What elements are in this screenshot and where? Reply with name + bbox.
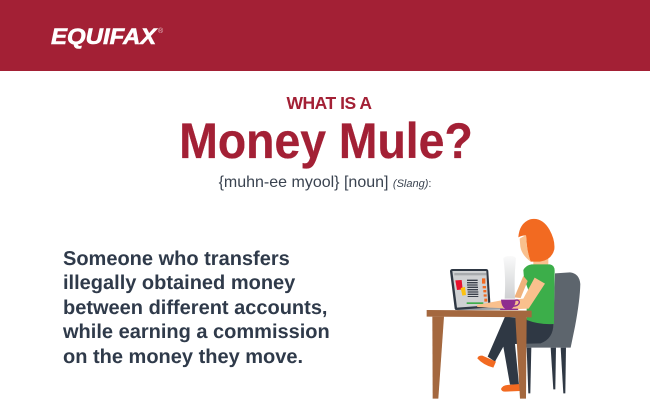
face (520, 235, 531, 262)
laptop base (456, 307, 503, 310)
far arm (514, 276, 528, 298)
pronunciation line: {muhn-ee myool} [noun] (Slang): (219, 174, 431, 191)
definition text: while earning a commission (63, 321, 330, 343)
title: Money Mule?: Money Mule? (179, 113, 473, 169)
definition text: on the money they move. (63, 346, 303, 368)
near arm (477, 278, 545, 309)
desk (427, 310, 532, 399)
torso (523, 264, 555, 324)
far shoe (477, 356, 496, 368)
logo: Equifax: EQUIFAX (51, 24, 156, 49)
header band (0, 0, 650, 71)
definition text: Someone who transfers (63, 248, 290, 270)
definition text (63, 248, 330, 368)
logo registered mark: ® (158, 28, 163, 35)
laptop screen (450, 269, 491, 310)
definition text: illegally obtained money (63, 272, 295, 294)
legs (488, 317, 553, 385)
chair (526, 272, 580, 393)
neck (533, 258, 548, 267)
hair (518, 219, 554, 262)
definition text: between different accounts, (63, 297, 328, 319)
near shoe (501, 384, 520, 392)
cup (500, 300, 519, 310)
heading: what is a: WHAT IS A (287, 93, 371, 113)
steam (503, 256, 516, 299)
